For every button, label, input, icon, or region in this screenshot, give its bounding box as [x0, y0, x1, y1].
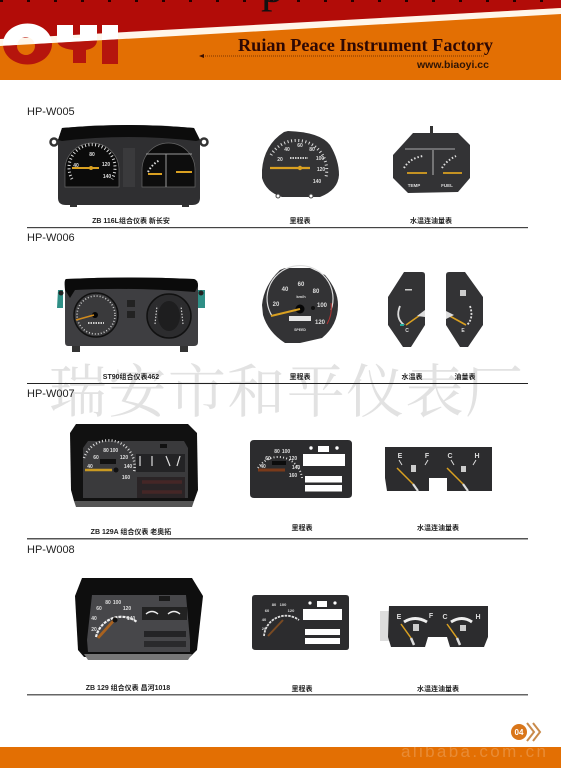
temperature and fuel gauge: E — [397, 614, 402, 621]
combined cluster: 100 — [110, 448, 118, 454]
section: HP-W008 — [27, 544, 528, 696]
speedometer: 80 — [272, 602, 277, 607]
combined cluster — [57, 278, 205, 352]
watermark: factory name: 瑞安市和平仪表厂 — [49, 360, 523, 425]
temperature and fuel gauge: H — [475, 614, 481, 621]
speedometer: 140 — [313, 179, 321, 185]
page number badge — [511, 723, 540, 741]
caption: 水温表 — [402, 372, 422, 381]
caption: 水温连油量表 — [417, 684, 459, 693]
speedometer: 120 — [315, 320, 326, 326]
speedometer: 40 — [284, 147, 290, 153]
speedometer — [262, 131, 339, 198]
section: HP-W005 — [27, 106, 528, 228]
header banner — [0, 0, 561, 80]
temperature and fuel gauge — [393, 126, 470, 193]
combined cluster: 40 — [91, 616, 97, 622]
footer band — [0, 747, 561, 768]
speedometer: 100 — [316, 156, 324, 162]
caption: ZB 129 组合仪表 昌河1018 — [86, 683, 170, 692]
speedometer: 140 — [292, 465, 300, 471]
combined cluster: 120 — [120, 455, 128, 461]
temperature and fuel gauge: TEMP — [408, 183, 420, 188]
speedometer: 120 — [288, 608, 295, 613]
page number badge: 04 — [515, 728, 524, 737]
temperature gauge — [388, 272, 425, 347]
caption: 油量表 — [454, 372, 476, 381]
speedometer: 20 — [273, 302, 280, 308]
combined cluster: 140 — [124, 464, 132, 470]
speedometer: 60 — [265, 456, 271, 462]
speedometer: 100 — [280, 602, 287, 607]
heading: HP-W008 — [27, 544, 75, 556]
combined cluster: 120 — [102, 162, 110, 168]
section: HP-W006 — [27, 232, 528, 384]
section divider — [27, 538, 528, 540]
speedometer: 80 — [313, 289, 320, 295]
section divider — [27, 694, 528, 696]
temperature and fuel gauge: F — [429, 613, 434, 620]
speedometer: 40 — [260, 464, 266, 470]
combined cluster: 120 — [123, 606, 131, 612]
section divider — [27, 227, 528, 228]
speedometer: 20 — [277, 157, 283, 163]
fuel gauge — [446, 272, 483, 347]
speedometer — [252, 595, 349, 650]
combined cluster: 60 — [93, 455, 99, 461]
combined cluster: 80 — [105, 600, 111, 606]
dotted arrow — [199, 54, 484, 58]
temperature and fuel gauge — [385, 447, 492, 491]
heading: HP-W006 — [27, 232, 75, 244]
temperature and fuel gauge — [380, 606, 488, 647]
heading: HP-W005 — [27, 106, 75, 118]
temperature and fuel gauge: E — [398, 453, 403, 460]
combined cluster: 160 — [122, 475, 130, 481]
combined cluster: 80 — [103, 448, 109, 454]
combined cluster — [70, 424, 198, 507]
speedometer: 60 — [265, 608, 270, 613]
speedometer: 80 — [309, 147, 315, 153]
logo: OYI — [3, 24, 118, 64]
speedometer: 100 — [282, 449, 290, 455]
speedometer: 60 — [297, 143, 303, 149]
watermark: alibaba: alibaba.com.cn — [401, 742, 546, 761]
speedometer: 60 — [298, 282, 305, 288]
combined cluster: 140 — [127, 616, 135, 622]
speedometer: 100 — [317, 303, 328, 309]
caption: 里程表 — [290, 216, 310, 225]
speedometer: 160 — [289, 473, 297, 479]
speedometer: 40 — [262, 617, 267, 622]
speedometer: 40 — [282, 287, 289, 293]
website: www.biaoyi.cc — [416, 60, 489, 71]
caption: ZB 129A 组合仪表 老奥拓 — [91, 527, 171, 536]
temperature and fuel gauge: F — [425, 453, 430, 460]
combined cluster: 80 — [89, 152, 95, 158]
temperature and fuel gauge: FUEL — [441, 183, 453, 188]
temperature and fuel gauge: C — [442, 614, 448, 621]
combined cluster: 20 — [91, 627, 97, 633]
temperature and fuel gauge: H — [474, 453, 480, 460]
combined cluster — [50, 125, 208, 207]
combined cluster: 60 — [96, 606, 102, 612]
company name: Ruian Peace Instrument Factory — [238, 35, 493, 55]
speedometer — [262, 266, 338, 343]
caption: 水温连油量表 — [410, 216, 452, 225]
caption: 里程表 — [292, 684, 312, 693]
fuel gauge: E — [461, 328, 465, 334]
temperature and fuel gauge: C — [447, 453, 453, 460]
caption: 里程表 — [292, 523, 312, 532]
speedometer — [250, 440, 352, 498]
combined cluster: 40 — [73, 163, 79, 169]
caption: ZB 116L组合仪表 新长安 — [92, 216, 170, 225]
speedometer: 120 — [317, 167, 325, 173]
temperature gauge: C — [405, 328, 409, 334]
speedometer: 120 — [289, 456, 297, 462]
combined cluster: 140 — [103, 174, 111, 180]
speedometer: km/h — [296, 294, 306, 299]
combined cluster: 40 — [87, 464, 93, 470]
caption: ST90组合仪表462 — [103, 372, 159, 381]
speedometer: 80 — [274, 449, 280, 455]
speedometer: SPEED — [294, 328, 306, 332]
combined cluster: 100 — [113, 600, 121, 606]
heading: HP-W007 — [27, 388, 75, 400]
section divider — [27, 383, 528, 384]
caption: 水温连油量表 — [417, 523, 459, 532]
combined cluster — [75, 578, 203, 660]
section: HP-W007 — [27, 388, 528, 540]
speedometer: 20 — [262, 626, 267, 631]
caption: 里程表 — [290, 372, 310, 381]
